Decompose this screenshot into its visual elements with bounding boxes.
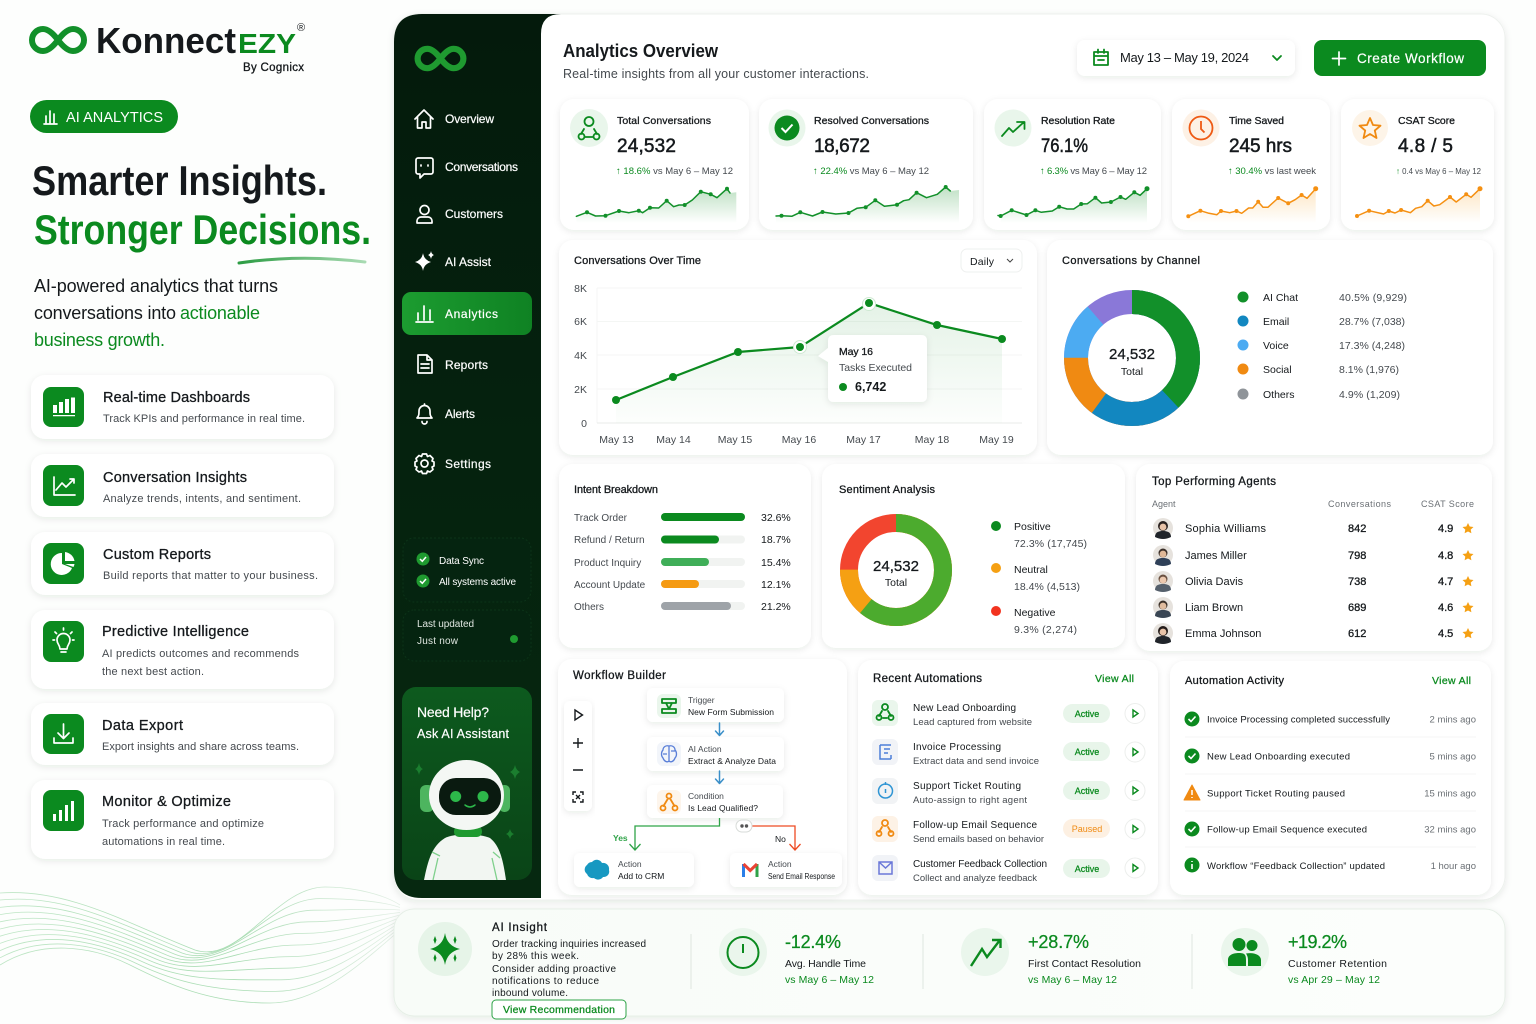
branch: yes: [613, 818, 720, 850]
agent row: emma johnson: Emma Johnson: [1185, 628, 1261, 640]
agent row: sophia williams: 4.9: [1438, 523, 1453, 535]
icon: star: [1360, 118, 1380, 138]
metric: first contact resolution: vs May 6 – May 12: [1028, 974, 1117, 986]
kpi: total conversations: 24,532: [617, 136, 676, 157]
metric: customer retention: +19.2%: [1288, 932, 1347, 952]
line chart: May 14: [656, 434, 691, 446]
dropdown: daily: [961, 249, 1022, 272]
activity: support ticket routing paused: Support Ticket Routing paused: [1207, 788, 1345, 800]
feature: data export: [31, 703, 334, 765]
nav: overview: Overview: [445, 112, 494, 126]
icon: download: [54, 724, 73, 743]
node: trigger: Trigger: [688, 695, 715, 705]
activity: follow-up email: Follow-up Email Sequence executed: [1207, 824, 1367, 836]
agent row: emma johnson: 612: [1348, 628, 1366, 640]
panel: sentiment analysis: Total: [885, 577, 907, 589]
row: customer feedback collection: Collect and analyze feedback: [913, 873, 1037, 884]
panel: workflow builder: [558, 659, 847, 895]
panel: sentiment analysis: Sentiment Analysis: [839, 484, 936, 496]
activity: invoice processing: Invoice Processing completed successfully: [1207, 714, 1390, 726]
feature: predictive intelligence: [31, 610, 334, 689]
icon: check: [774, 116, 800, 140]
node: add to crm: Add to CRM: [618, 871, 664, 881]
nav: conversations: Conversations: [445, 160, 518, 174]
row: customer feedback collection: Active: [1075, 864, 1099, 874]
status box: data sync: All systems active: [439, 577, 516, 588]
headline: Smarter Insights.: [32, 157, 327, 204]
legend: Positive: [1014, 521, 1051, 533]
line chart: May 18: [915, 434, 949, 446]
status box: data sync: Data Sync: [439, 556, 484, 567]
metric: handle time: Avg. Handle Time: [785, 958, 866, 970]
icon: people network: [578, 117, 600, 140]
node: condition: Condition: [688, 791, 724, 801]
tooltip: [818, 335, 927, 402]
date range picker: May 13 – May 19, 2024: [1120, 50, 1249, 65]
legend: Voice: [1263, 340, 1289, 352]
line chart: 4K: [574, 350, 587, 362]
node: trigger: New Form Submission: [688, 707, 774, 717]
byline: By Cognicx: [243, 62, 304, 74]
kpi: resolution rate: 76.1%: [1041, 136, 1088, 157]
kpi: resolved conversations: Resolved Conversations: [814, 115, 929, 127]
badge: AI analytics: AI ANALYTICS: [66, 110, 163, 126]
row: new lead onboarding: [872, 700, 1145, 728]
feature: predictive intelligence: Predictive Intelligence: [102, 624, 249, 640]
nav: analytics active: [402, 292, 532, 335]
intro paragraph: [34, 276, 278, 350]
icon: bars: [44, 111, 57, 124]
agent row: james miller: 798: [1348, 550, 1366, 562]
icon: salesforce cloud: [585, 860, 609, 880]
sparkline: [576, 187, 736, 223]
node: trigger: [647, 688, 784, 722]
agent row: sophia williams: [1153, 518, 1474, 539]
feature: real-time dashboards: [31, 375, 334, 439]
branch: yes: Yes: [613, 833, 628, 843]
agent row: james miller: [1153, 545, 1474, 566]
node: add to crm: Action: [618, 859, 642, 869]
feature: conversation insights: Conversation Insights: [103, 470, 247, 486]
agent row: liam brown: [1153, 597, 1474, 618]
metric: first contact resolution: [961, 928, 1141, 986]
sparkline: [1186, 186, 1318, 223]
donut chart: [849, 523, 943, 617]
feature: conversation insights: Analyze trends, intents, and sentiment.: [103, 493, 301, 505]
feature: monitor and optimize: automations in real time.: [102, 836, 225, 848]
intro paragraph: conversations into: [34, 303, 176, 323]
legend: 72.3% (17,745): [1014, 538, 1087, 550]
sidebar: [394, 14, 561, 898]
kpi: resolution rate: [984, 99, 1161, 230]
row: support ticket routing: [872, 778, 1145, 806]
kpi: time saved: [1172, 99, 1330, 230]
nav: ai assist: [415, 251, 492, 271]
row: invoice processing: [872, 739, 1145, 767]
bar: others: 21.2%: [761, 601, 791, 613]
row: new lead onboarding: Lead captured from website: [913, 717, 1032, 728]
nav: alerts: Alerts: [445, 407, 475, 421]
date range picker: [1077, 40, 1295, 76]
panel: conversations by channel: Total: [1121, 366, 1143, 378]
background wave decoration: [0, 887, 400, 1003]
status box: last updated: [403, 610, 531, 661]
panel: top performing agents: [1136, 464, 1492, 651]
nav: reports: Reports: [445, 358, 488, 372]
feature: predictive intelligence: AI predicts outcomes and recommends: [102, 648, 300, 660]
row: follow-up email sequence: Send emails based on behavior: [913, 834, 1044, 845]
node: condition: [647, 785, 783, 818]
sparkline: [998, 186, 1150, 223]
branch: no: [736, 820, 800, 850]
panel: intent breakdown: [559, 464, 811, 648]
insight text: by 28% this week.: [492, 951, 579, 962]
status box: last updated: Just now: [417, 636, 459, 647]
kpi: time saved: Time Saved: [1229, 115, 1284, 127]
bar: account update: 12.1%: [761, 579, 791, 591]
kpi: resolution rate: Resolution Rate: [1041, 115, 1115, 127]
node: send email response: [730, 853, 842, 887]
feature: data export: Export insights and share across teams.: [102, 741, 299, 753]
panel: automation activity: [1170, 661, 1491, 895]
node: condition: Is Lead Qualified?: [688, 803, 758, 813]
node: send email response: Send Email Response: [768, 872, 835, 881]
agent row: james miller: James Miller: [1185, 550, 1247, 562]
sparkline: [1355, 186, 1482, 223]
icon: ai sparkle: [418, 922, 472, 976]
agent row: emma johnson: [1153, 623, 1474, 644]
feature: monitor and optimize: Monitor & Optimize: [102, 794, 231, 810]
icon: sidebar logo: [418, 49, 463, 68]
legend: [1238, 292, 1407, 401]
panel: sentiment analysis: [822, 464, 1125, 648]
kpi: total conversations: ↑ 18.6% vs May 6 – May 12: [616, 166, 733, 177]
icon: calendar: [1094, 50, 1108, 65]
dashboard main panel: [394, 14, 1505, 900]
toolbar: [564, 701, 592, 811]
intro paragraph: actionable: [180, 303, 260, 323]
activity: new lead onboarding: New Lead Onboarding executed: [1207, 752, 1350, 762]
wordmark accent: EZY: [238, 28, 296, 59]
legend: AI Chat: [1263, 292, 1298, 304]
bar: account update: [574, 579, 791, 591]
agent row: sophia williams: 842: [1348, 523, 1366, 535]
agent row: olivia davis: [1153, 571, 1474, 592]
kpi: resolution rate: ↑ 6.3% vs May 6 – May 12: [1040, 166, 1147, 177]
metric: customer retention: vs Apr 29 – May 12: [1288, 974, 1380, 986]
kpi: time saved: ↑ 30.4% vs last week: [1228, 166, 1316, 177]
node: ai action: [647, 737, 784, 771]
kpi: resolved conversations: 18,672: [814, 136, 870, 157]
activity: follow-up email: 32 mins ago: [1424, 824, 1476, 836]
icon: line chart: [54, 477, 75, 495]
kpi: csat score: CSAT Score: [1398, 115, 1455, 127]
tooltip: May 16: [839, 346, 873, 358]
icon: chevron: [1273, 56, 1281, 60]
kpi: csat score: 4.8 / 5: [1398, 136, 1453, 157]
activity: new lead onboarding: [1184, 748, 1476, 764]
activity: follow-up email: [1184, 822, 1476, 836]
donut chart: [1076, 302, 1188, 414]
status box: last updated: Last updated: [417, 619, 474, 630]
row: new lead onboarding: Active: [1075, 709, 1099, 719]
agent row: liam brown: 4.6: [1438, 602, 1453, 614]
underline swoosh: [239, 258, 365, 263]
activity: support ticket routing paused: [1184, 785, 1476, 800]
bar: others: [574, 601, 791, 613]
metric: handle time: vs May 6 – May 12: [785, 974, 874, 986]
legend: [991, 521, 1087, 636]
status box: data sync: [403, 538, 531, 602]
headline: [32, 157, 371, 263]
activity: invoice processing: 2 mins ago: [1430, 714, 1476, 726]
feature: monitor and optimize: Track performance and optimize: [102, 818, 264, 830]
row: new lead onboarding: New Lead Onboarding: [913, 703, 1016, 714]
kpi: csat score: ↑ 0.4 vs May 6 – May 12: [1396, 166, 1481, 176]
panel: automation activity: Automation Activity: [1185, 675, 1284, 687]
bar: others: Others: [574, 602, 604, 613]
metric: handle time: -12.4%: [785, 932, 841, 952]
badge: AI analytics: [30, 100, 178, 133]
branch: no: No: [775, 834, 786, 844]
logo: [32, 20, 305, 74]
agent row: olivia davis: 4.7: [1438, 576, 1453, 588]
legend: 17.3% (4,248): [1339, 340, 1405, 352]
insight text: [492, 922, 646, 999]
node: ai action: AI Action: [688, 744, 722, 754]
legend: Others: [1263, 389, 1295, 401]
nav: ai assist: AI Assist: [445, 255, 492, 269]
line chart: May 15: [718, 434, 752, 446]
metric: first contact resolution: First Contact Resolution: [1028, 958, 1141, 970]
activity: feedback collection updated: Workflow “Feedback Collection” updated: [1207, 861, 1385, 872]
button: create workflow: Create Workflow: [1357, 51, 1464, 66]
row: follow-up email sequence: Paused: [1072, 824, 1102, 834]
nav: reports: [418, 355, 488, 373]
insight text: notifications to reduce: [492, 976, 599, 987]
dropdown: daily: Daily: [970, 256, 995, 268]
line chart: May 13: [599, 434, 634, 446]
feature: monitor and optimize: [31, 780, 334, 859]
metric: handle time: [719, 928, 874, 986]
activity: support ticket routing paused: 15 mins ago: [1424, 788, 1476, 800]
line chart: May 16: [782, 434, 816, 446]
header: analytics overview: Real-time insights from all your customer interactions.: [563, 67, 869, 81]
line chart: 2K: [574, 384, 587, 396]
row: support ticket routing: Active: [1075, 786, 1099, 796]
kpi: total conversations: Total Conversations: [617, 115, 711, 127]
icon: bar chart: [53, 398, 75, 416]
node: send email response: Action: [768, 859, 792, 869]
button: view recommendation: [492, 1000, 626, 1019]
panel: intent breakdown: Intent Breakdown: [574, 484, 658, 496]
line chart: 0: [581, 418, 587, 430]
bar: track order: [574, 512, 791, 524]
legend: Email: [1263, 316, 1289, 328]
legend: Social: [1263, 364, 1292, 376]
panel: automation activity: View All: [1432, 675, 1471, 687]
node: add to crm: [574, 853, 694, 887]
panel: workflow builder: Workflow Builder: [573, 670, 666, 682]
panel: ai insight bar: [394, 909, 1505, 1019]
agent row: sophia williams: Sophia Williams: [1185, 523, 1266, 535]
activity: feedback collection updated: [1184, 858, 1476, 872]
panel: top performing agents: Top Performing Agents: [1152, 476, 1276, 488]
legend: 9.3% (2,274): [1014, 624, 1077, 636]
intro paragraph: AI-powered analytics that turns: [34, 276, 278, 296]
sparkline: [776, 185, 959, 223]
legend: 8.1% (1,976): [1339, 364, 1399, 376]
agent row: james miller: 4.8: [1438, 550, 1453, 562]
registered mark: ®: [297, 22, 305, 34]
row: support ticket routing: Auto-assign to right agent: [913, 795, 1027, 806]
headline green: Stronger Decisions.: [34, 206, 371, 253]
bar: refund: Refund / Return: [574, 535, 645, 546]
robot: [420, 760, 510, 880]
nav: customers: Customers: [445, 207, 503, 221]
agent row: liam brown: 689: [1348, 602, 1366, 614]
nav: conversations: [416, 158, 518, 178]
activity: feedback collection updated: 1 hour ago: [1431, 861, 1476, 872]
legend: Neutral: [1014, 564, 1048, 576]
icon: clock: [1190, 116, 1212, 140]
help card with robot: Need Help?: [417, 704, 489, 720]
row: follow-up email sequence: [872, 816, 1145, 845]
panel: conversations by channel: 24,532: [1109, 346, 1155, 363]
nav: settings: Settings: [445, 457, 491, 471]
button: create workflow: [1314, 40, 1486, 76]
agent row: olivia davis: Olivia Davis: [1185, 576, 1244, 588]
legend: 4.9% (1,209): [1339, 389, 1400, 401]
panel: conversations over time: Conversations Over Time: [574, 255, 701, 267]
feature: predictive intelligence: the next best action.: [102, 666, 204, 678]
panel: conversations over time: [559, 240, 1037, 455]
nav: overview: [415, 110, 494, 128]
sparkles: [415, 763, 520, 839]
feature: data export: Data Export: [102, 718, 183, 734]
metric: first contact resolution: +28.7%: [1028, 932, 1089, 952]
header: analytics overview: Analytics Overview: [563, 41, 719, 61]
feature: custom reports: [31, 532, 334, 595]
icon: gmail m: [744, 864, 757, 877]
arrow: ai action to condition: [716, 771, 724, 784]
bar: refund: 18.7%: [761, 534, 791, 546]
agent row: olivia davis: 738: [1348, 576, 1366, 588]
insight text: AI Insight: [492, 922, 548, 934]
legend: Negative: [1014, 607, 1056, 619]
button: view recommendation: View Recommendation: [503, 1004, 615, 1016]
nav: settings: [415, 454, 491, 474]
help card with robot: [402, 687, 532, 880]
agent row: liam brown: Liam Brown: [1185, 602, 1243, 614]
feature: real-time dashboards: Real-time Dashboards: [103, 390, 250, 406]
help card with robot: Ask AI Assistant: [417, 727, 510, 741]
row: customer feedback collection: [872, 855, 1145, 884]
kpi: total conversations: [560, 99, 749, 230]
panel: recent automations: [858, 660, 1158, 895]
activity: new lead onboarding: 5 mins ago: [1430, 752, 1476, 762]
icon: signal bars: [53, 801, 74, 821]
arrow: trigger to ai action: [716, 723, 724, 736]
kpi: resolved conversations: [759, 99, 973, 230]
tooltip: 6,742: [855, 380, 886, 394]
icon: trend up: [1002, 122, 1024, 136]
legend: 18.4% (4,513): [1014, 581, 1080, 593]
tooltip: Tasks Executed: [839, 362, 912, 374]
insight text: Consider adding proactive: [492, 964, 616, 975]
line chart: 8K: [574, 283, 587, 295]
row: customer feedback collection: Customer Feedback Collection: [913, 859, 1047, 870]
row: invoice processing: Invoice Processing: [913, 742, 1001, 753]
header: analytics overview: [563, 41, 869, 81]
feature: real-time dashboards: Track KPIs and performance in real time.: [103, 413, 305, 425]
insight text: inbound volume.: [492, 988, 568, 999]
panel: recent automations: Recent Automations: [873, 673, 982, 685]
feature: conversation insights: [31, 454, 334, 517]
bar: track order: Track Order: [574, 513, 628, 524]
nav: customers: [417, 206, 503, 223]
kpi: time saved: 245 hrs: [1229, 136, 1292, 157]
activity: invoice processing: [1184, 712, 1476, 726]
bar: refund: [574, 534, 791, 546]
feature: custom reports: Custom Reports: [103, 547, 211, 563]
panel: sentiment analysis: 24,532: [873, 558, 919, 575]
row: invoice processing: Extract data and send invoice: [913, 756, 1039, 767]
intro paragraph: business growth.: [34, 330, 165, 350]
icon: infinity logo: [32, 29, 84, 51]
line chart: May 17: [846, 434, 881, 446]
kpi: resolved conversations: ↑ 22.4% vs May 6 – May 12: [813, 166, 929, 177]
bar: product inquiry: 15.4%: [761, 557, 791, 569]
panel: top performing agents: CSAT Score: [1421, 499, 1474, 509]
kpi: csat score: [1341, 99, 1494, 230]
panel: conversations by channel: Conversations by Channel: [1062, 255, 1200, 267]
panel: top performing agents: Conversations: [1328, 499, 1392, 509]
nav: alerts: [417, 404, 475, 424]
metric: customer retention: [1221, 928, 1387, 986]
bar: product inquiry: [574, 557, 791, 569]
line chart: 6K: [574, 316, 587, 328]
row: invoice processing: Active: [1075, 747, 1099, 757]
line chart: [574, 283, 1022, 446]
feature: custom reports: Build reports that matter to your business.: [103, 570, 318, 582]
bar: product inquiry: Product Inquiry: [574, 558, 641, 569]
icon: light bulb: [53, 628, 74, 652]
bar: track order: 32.6%: [761, 512, 791, 524]
panel: recent automations: View All: [1095, 673, 1134, 685]
legend: 28.7% (7,038): [1339, 316, 1405, 328]
panel: conversations by channel: [1047, 240, 1493, 455]
metric: customer retention: Customer Retention: [1288, 958, 1387, 970]
bar: account update: Account Update: [574, 580, 646, 591]
panel: top performing agents: Agent: [1152, 499, 1176, 509]
line chart: May 19: [979, 434, 1014, 446]
row: support ticket routing: Support Ticket Routing: [913, 781, 1021, 792]
wordmark: Konnect: [96, 20, 236, 61]
row: follow-up email sequence: Follow-up Email Sequence: [913, 820, 1037, 831]
node: ai action: Extract & Analyze Data: [688, 756, 776, 766]
legend: 40.5% (9,929): [1339, 292, 1407, 304]
nav: analytics active: Analytics: [445, 307, 498, 321]
insight text: Order tracking inquiries increased: [492, 939, 646, 950]
icon: pie chart: [51, 553, 72, 575]
agent row: emma johnson: 4.5: [1438, 628, 1453, 640]
